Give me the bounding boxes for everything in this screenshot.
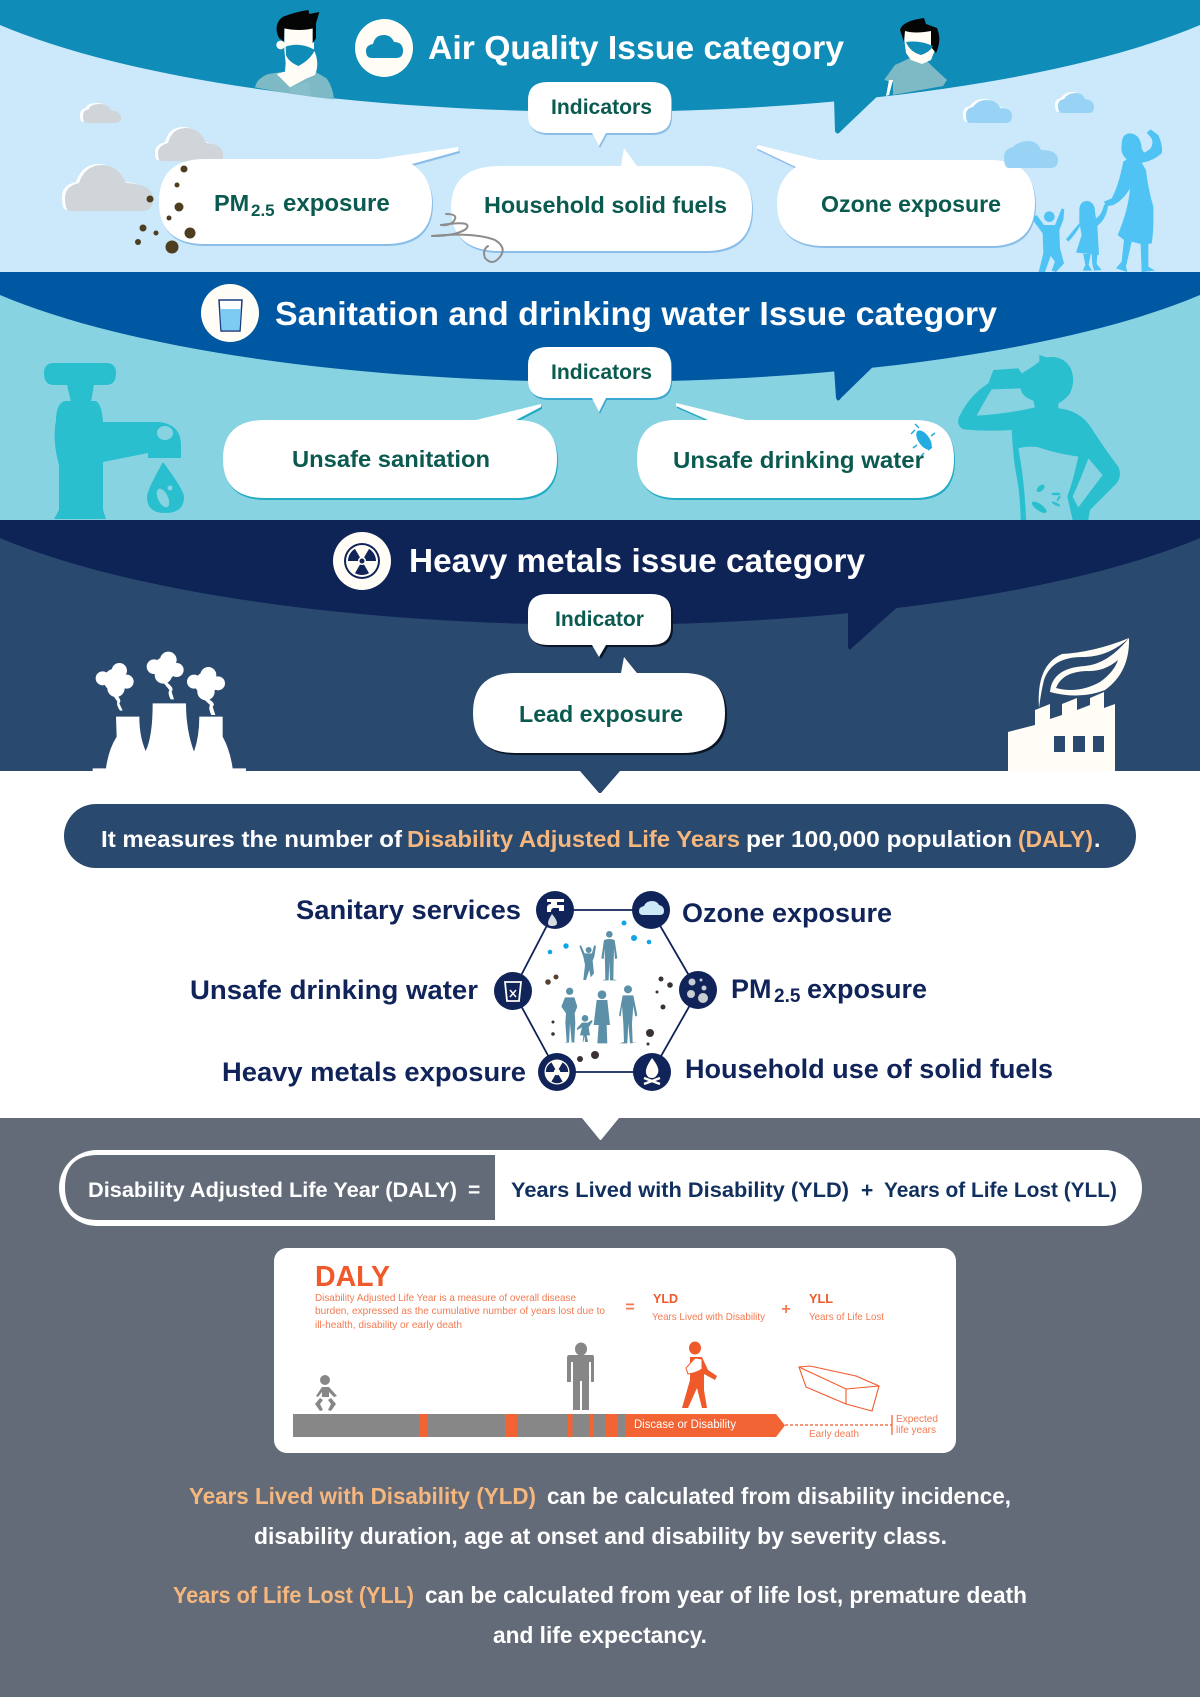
icon: water tap [44, 363, 184, 519]
text: YLD explanation: disability duration, age at onset and disability by severity class. [254, 1523, 947, 1549]
callout: DALY measure: . [1094, 826, 1100, 852]
label: PM2.5 exposure: 2.5 [774, 986, 801, 1007]
text: YLD explanation: Years Lived with Disability (YLD) [189, 1483, 536, 1509]
icon: standing man [567, 1342, 594, 1410]
bubble: PM2.5 exposure: exposure [283, 190, 390, 217]
formula pill [59, 1150, 1142, 1226]
bubble: ozone exposure [756, 145, 1035, 246]
title: heavy metals: Heavy metals issue category [409, 542, 866, 579]
chart: life timeline bar: Discase or Disability [634, 1419, 736, 1431]
bubble: indicators [528, 347, 671, 412]
DALY definition [315, 1292, 605, 1331]
title: air quality: Air Quality Issue category [428, 29, 845, 66]
icon: tap highlight [157, 426, 173, 440]
panel: DALY explanation [0, 1118, 1200, 1697]
heading: DALY: DALY [315, 1261, 390, 1293]
DALY definition: Disability Adjusted Life Year is a measure of overall disease [315, 1292, 576, 1304]
label: ozone exposure: Ozone exposure [682, 898, 892, 928]
blue particles [548, 920, 651, 954]
icon: cloud near family [1004, 141, 1058, 168]
label: heavy metals exposure: Heavy metals exposure [222, 1057, 526, 1087]
speech banner: sanitation [0, 272, 1200, 400]
bubble: unsafe drinking water [637, 403, 954, 498]
arrow: section pointer [582, 1118, 619, 1140]
label: PM2.5 exposure: PM [731, 974, 772, 1004]
bubble: PM2.5 exposure: PM [214, 190, 249, 216]
text: YLL explanation [173, 1582, 1027, 1648]
equals sign: = [625, 1299, 635, 1316]
YLD term: YLD [653, 1291, 678, 1306]
bubble: lead exposure [473, 657, 725, 753]
DALY definition: burden, expressed as the cumulative number of years lost due to [315, 1305, 605, 1317]
early death marker: Expected [896, 1413, 938, 1425]
bubble: PM2.5 exposure: 2.5 [251, 201, 275, 220]
callout: DALY measure: It measures the number of [101, 826, 402, 852]
callout: DALY measure: per 100,000 population [746, 826, 1012, 852]
bubble: indicators: Indicators [551, 361, 652, 384]
icon: green factory [1008, 638, 1129, 771]
panel: DALY diagram card [274, 1248, 956, 1453]
panel: air quality [0, 0, 1200, 272]
text: YLD explanation [189, 1483, 1011, 1549]
DALY definition: ill-health, disability or early death [315, 1319, 462, 1331]
callout: DALY measure: (DALY) [1018, 826, 1093, 852]
icon: cloud badge [355, 19, 413, 77]
icon: grey clouds [65, 104, 223, 211]
YLD term: Years Lived with Disability [652, 1311, 766, 1323]
panel: sanitation and drinking water [0, 272, 1200, 520]
icon: pollution particles [135, 166, 196, 254]
icon: flame node [633, 1053, 671, 1091]
bubble: indicators [528, 82, 671, 146]
plus sign: + [781, 1301, 791, 1318]
panel: measures [0, 771, 1200, 1118]
icon: factory windows [1054, 736, 1104, 752]
text: YLL explanation: Years of Life Lost (YLL) [173, 1582, 414, 1608]
bubble: unsafe sanitation [223, 404, 557, 498]
bubble: indicators: Indicators [551, 96, 652, 119]
bubble: indicator: Indicator [555, 608, 644, 631]
formula pill: = [468, 1179, 480, 1202]
icon: blue clouds [966, 93, 1094, 123]
icon: wind swirl [432, 214, 503, 262]
icon: drinking person [958, 355, 1120, 520]
bubble: PM2.5 exposure [159, 147, 459, 244]
icon: baby [315, 1375, 337, 1411]
icon: germ on bubble [911, 424, 935, 456]
title: sanitation: Sanitation and drinking water Issue category [275, 295, 998, 332]
bubble: unsafe drinking water: Unsafe drinking water [673, 447, 924, 473]
icon: injured man [682, 1342, 717, 1408]
label: PM2.5 exposure: exposure [807, 974, 927, 1004]
early death marker [785, 1413, 938, 1440]
speech banner: air quality [0, 0, 1200, 134]
callout: DALY measure: Disability Adjusted Life Years [407, 826, 740, 852]
icon: tap node [536, 891, 574, 929]
dark particles [545, 974, 673, 1062]
early death marker: life years [896, 1424, 936, 1436]
speech banner: heavy metals [0, 520, 1200, 650]
bubble: household solid fuels [451, 148, 752, 251]
icon: cooling towers [93, 652, 246, 772]
formula pill: + [861, 1179, 873, 1202]
YLL term: Years of Life Lost [809, 1311, 884, 1323]
formula pill: Years of Life Lost (YLL) [884, 1179, 1117, 1202]
label: household use of solid fuels: Household use of solid fuels [685, 1054, 1053, 1084]
early death marker: Early death [809, 1428, 859, 1440]
text: YLL explanation: can be calculated from year of life lost, premature death [425, 1582, 1027, 1608]
panel: heavy metals [0, 520, 1200, 772]
arrow: section pointer [580, 771, 620, 793]
formula pill: Years Lived with Disability (YLD) [511, 1179, 849, 1202]
icon: radiation node [538, 1053, 576, 1091]
YLL term [809, 1291, 884, 1323]
text: YLL explanation: and life expectancy. [493, 1622, 707, 1648]
chart: hexagon of exposures [494, 891, 717, 1091]
bubble: lead exposure: Lead exposure [519, 701, 683, 727]
formula pill: Disability Adjusted Life Year (DALY) [88, 1179, 457, 1202]
chart: life timeline bar [293, 1414, 785, 1437]
bubble: unsafe sanitation: Unsafe sanitation [292, 446, 490, 472]
bubble: ozone exposure: Ozone exposure [821, 191, 1001, 217]
YLD term [652, 1291, 766, 1323]
YLL term: YLL [809, 1291, 833, 1306]
icon: glass badge [201, 284, 259, 342]
icon: cloud node [632, 891, 670, 929]
icon: glass node [494, 972, 532, 1010]
icon: coffin [799, 1366, 879, 1411]
icon: masked man right [884, 18, 947, 96]
icon: radiation badge [333, 532, 391, 590]
icon: germ in droplet [154, 486, 172, 509]
bubble: indicator [528, 594, 671, 657]
label: sanitary services: Sanitary services [296, 895, 521, 925]
text: YLD explanation: can be calculated from disability incidence, [547, 1483, 1011, 1509]
icon: family silhouette [1034, 129, 1162, 272]
icon: particles node [679, 971, 717, 1009]
icon: masked man left [255, 10, 334, 99]
label: unsafe drinking water: Unsafe drinking water [190, 975, 478, 1005]
people illustration [561, 931, 637, 1043]
bubble: household solid fuels: Household solid fuels [484, 192, 727, 218]
callout: DALY measure [64, 804, 1136, 868]
